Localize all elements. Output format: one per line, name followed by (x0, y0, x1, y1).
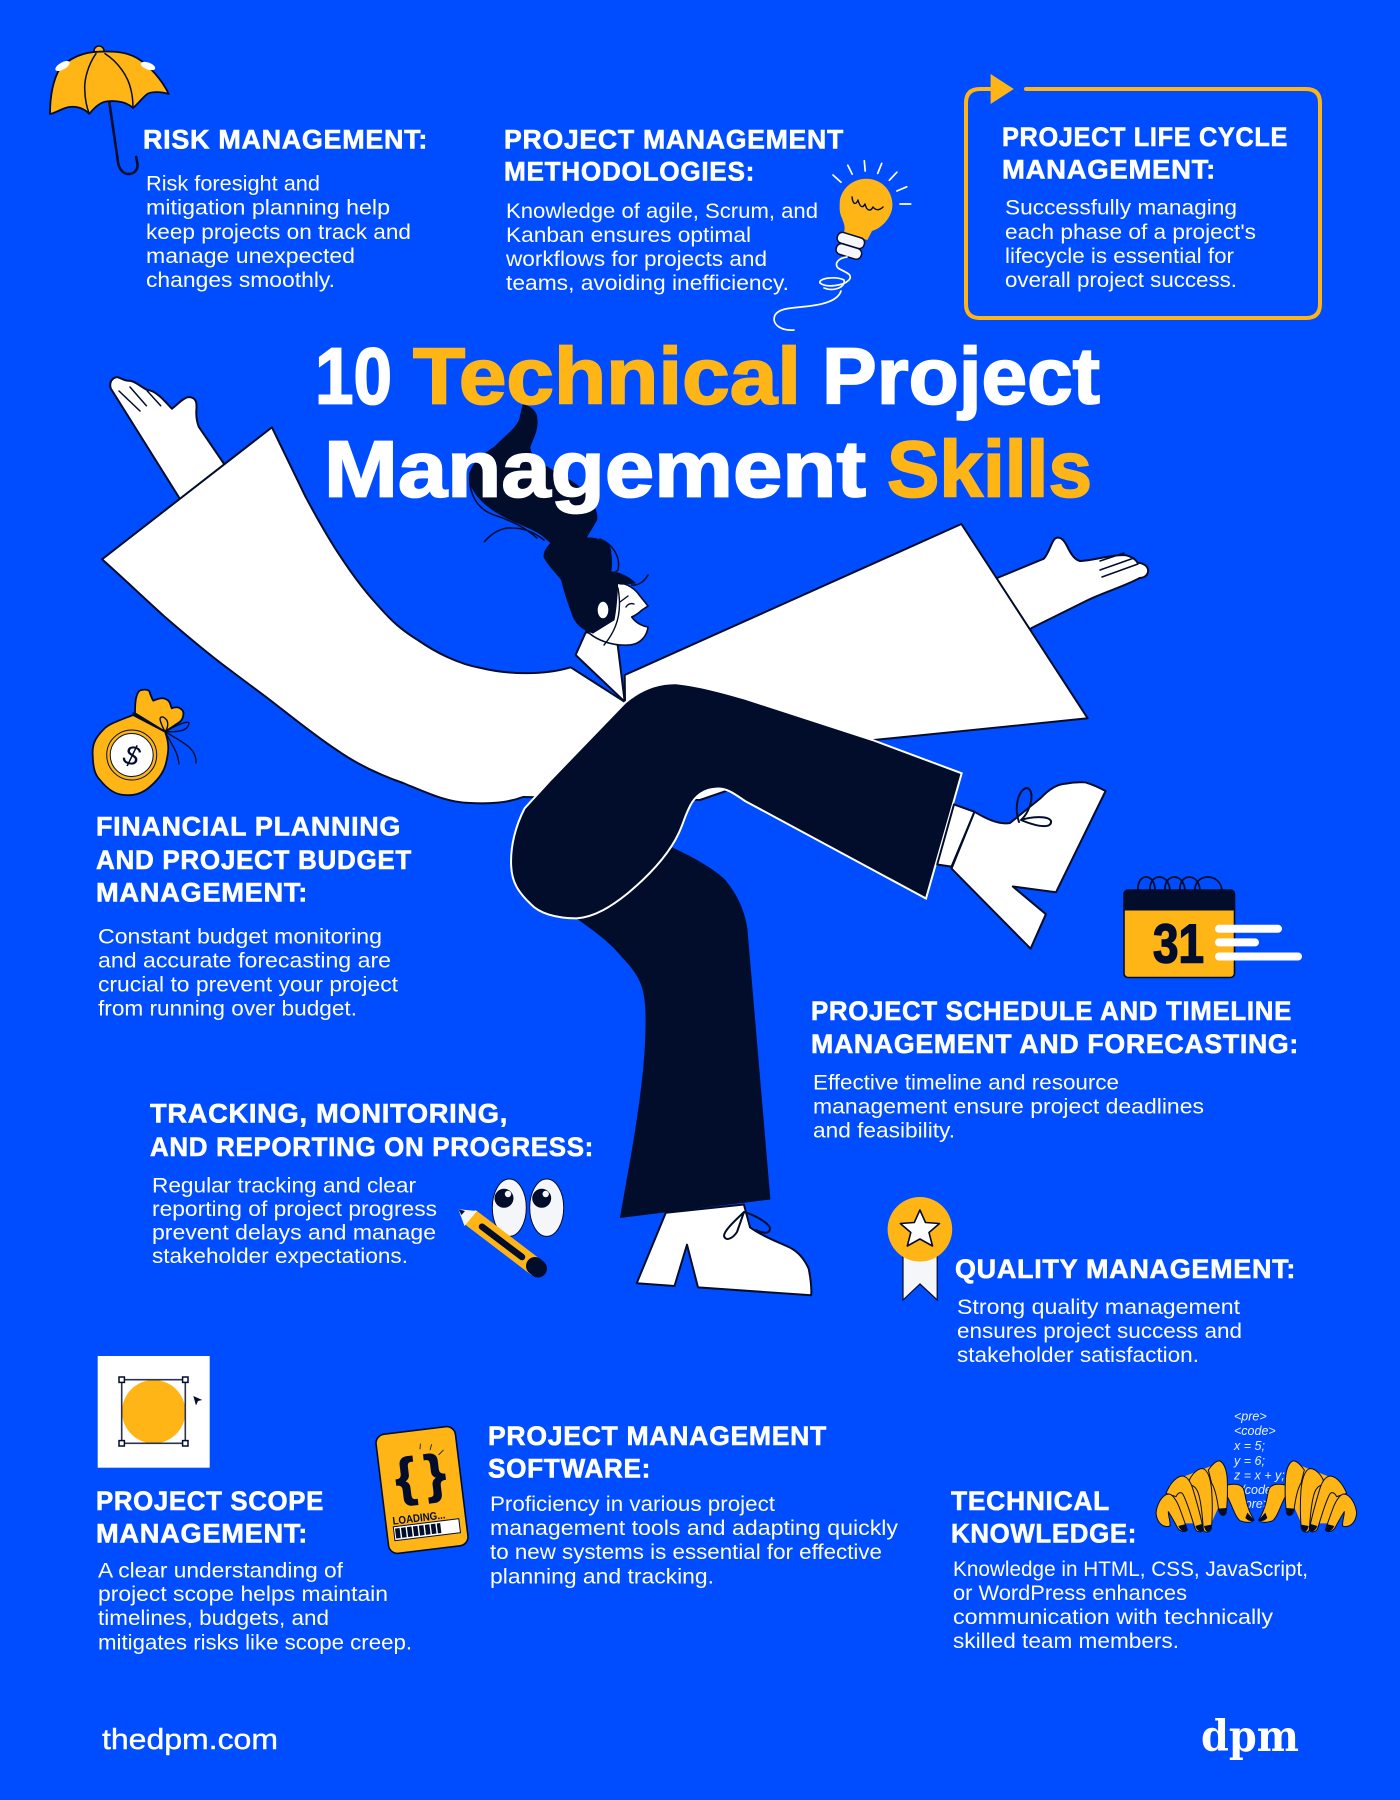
footer: website: thedpm.com (102, 1724, 278, 1756)
text block: quality management: stakeholder satisfaction. (957, 1343, 1199, 1367)
icon: calendar (1124, 877, 1298, 978)
text block: technical knowledge: skilled team members. (953, 1629, 1179, 1653)
text block: project schedule and timeline: MANAGEMENT AND FORECASTING: (811, 1029, 1299, 1059)
hair strands (470, 473, 648, 585)
text block: tracking, monitoring and reporting: stakeholder expectations. (152, 1244, 408, 1268)
text block: project scope management: timelines, budgets, and (98, 1606, 329, 1630)
text block: project scope management: mitigates risks like scope creep. (98, 1630, 412, 1654)
icon: money bag (93, 690, 196, 795)
title: Technical (413, 332, 801, 421)
text block: technical knowledge (951, 1486, 1308, 1653)
text block: quality management: ensures project success and (957, 1319, 1242, 1343)
text block: project schedule and timeline: PROJECT SCHEDULE AND TIMELINE (811, 996, 1292, 1026)
code snippet: <pre> (1234, 1410, 1267, 1424)
coat collar (576, 632, 625, 702)
icon: loading phone card (375, 1426, 469, 1554)
white coat with sleeves (102, 427, 1088, 803)
text block: project management software: Proficiency in various project (490, 1492, 775, 1516)
text block: project management software: management tools and adapting quickly (490, 1516, 898, 1540)
title (315, 332, 1100, 514)
code snippet: y = 6; (1233, 1454, 1265, 1468)
icon: light bulb (774, 161, 911, 330)
panel text: overall project success. (1005, 268, 1237, 292)
code snippet: x = 5; (1233, 1439, 1265, 1453)
text block: project schedule and timeline: management ensure project deadlines (813, 1095, 1204, 1119)
code snippet: z = x + y; (1233, 1468, 1285, 1482)
text block: tracking, monitoring and reporting: prevent delays and manage (152, 1220, 436, 1244)
text block: risk management: manage unexpected (146, 244, 355, 268)
left arm and hand (110, 377, 235, 515)
text block: project management software: PROJECT MANAGEMENT (488, 1421, 827, 1451)
footer: dpm logo: dpm (1201, 1712, 1299, 1762)
text block: project scope management (96, 1486, 412, 1654)
eye and brow lines (604, 588, 634, 645)
text block: financial planning: crucial to prevent your project (98, 973, 398, 997)
title: Skills (887, 425, 1092, 514)
text block: tracking, monitoring and reporting: TRACKING, MONITORING, (150, 1099, 508, 1129)
icon: loading phone card: } (422, 1444, 449, 1504)
text block: project management software: to new systems is essential for effective (490, 1540, 882, 1564)
text block: risk management (143, 124, 428, 292)
code snippet: <code> (1234, 1424, 1276, 1438)
icon: scope selection box (98, 1356, 210, 1468)
text block: project schedule and timeline: Effective timeline and resource (813, 1071, 1119, 1095)
code snippet: </code> (1234, 1483, 1279, 1497)
text block: financial planning (96, 812, 412, 1021)
text block: project scope management: MANAGEMENT: (96, 1519, 308, 1549)
text block: risk management: keep projects on track and (146, 220, 411, 244)
text block: project scope management: A clear understanding of (98, 1558, 343, 1582)
text block: project management methodologies: Knowledge of agile, Scrum, and (506, 199, 818, 223)
text block: project management methodologies: METHODOLOGIES: (504, 157, 755, 187)
icon: umbrella (50, 46, 169, 174)
icon: loading phone card: LOADING... (392, 1509, 446, 1528)
thigh of trouser (511, 683, 962, 918)
text block: technical knowledge: communication with technically (953, 1605, 1273, 1629)
lower foot boot (637, 1204, 811, 1295)
text block: project management methodologies: PROJECT MANAGEMENT (504, 124, 844, 154)
text block: project schedule and timeline: and feasibility. (813, 1119, 955, 1143)
text block: financial planning: Constant budget monitoring (98, 924, 382, 948)
icon: loading phone card: { (392, 1448, 419, 1508)
code snippet (1233, 1410, 1285, 1511)
code snippet: </pre> (1234, 1497, 1270, 1511)
text block: risk management: Risk foresight and (146, 172, 320, 196)
text block: project management software: SOFTWARE: (488, 1454, 651, 1484)
text block: risk management: changes smoothly. (146, 268, 335, 292)
text block: project scope management: project scope helps maintain (98, 1582, 388, 1606)
text block: risk management: mitigation planning help (146, 196, 390, 220)
panel text (1002, 122, 1288, 292)
raised foot sock and boot (937, 782, 1106, 949)
icon: medal with star (888, 1197, 952, 1300)
text block: tracking, monitoring and reporting: AND REPORTING ON PROGRESS: (150, 1132, 594, 1162)
hair (469, 405, 635, 633)
text block: quality management (955, 1254, 1296, 1367)
icon: money bag: $ (119, 738, 144, 773)
title: 10 (315, 332, 392, 421)
title: Project (822, 332, 1100, 421)
icon: typing hands with code (1156, 1410, 1357, 1532)
text block: quality management: Strong quality management (957, 1295, 1240, 1319)
text block: technical knowledge: or WordPress enhances (953, 1581, 1187, 1605)
text block: tracking, monitoring and reporting: Regular tracking and clear (152, 1173, 416, 1197)
panel text: Successfully managing (1005, 196, 1237, 220)
panel text: each phase of a project's (1005, 220, 1256, 244)
looped box outline (966, 89, 1320, 318)
text block: project management software: planning and tracking. (490, 1564, 714, 1588)
left hand (1156, 1461, 1254, 1532)
text block: project management methodologies: Kanban ensures optimal (506, 223, 751, 247)
title: Management (324, 425, 866, 514)
panel: project life cycle management (966, 74, 1320, 318)
text block: risk management: RISK MANAGEMENT: (143, 124, 428, 154)
text block: financial planning: from running over budget. (98, 997, 357, 1021)
text block: project management methodologies (504, 124, 844, 295)
face (586, 583, 648, 645)
lower trouser leg (570, 840, 770, 1218)
panel text: lifecycle is essential for (1005, 244, 1234, 268)
icon: eyes and pencil (458, 1179, 564, 1268)
text block: project schedule and timeline (811, 996, 1299, 1143)
text block: quality management: QUALITY MANAGEMENT: (955, 1254, 1296, 1284)
panel text: MANAGEMENT: (1002, 155, 1216, 185)
illustration: flying figure in white coat (102, 377, 1148, 1295)
text block: financial planning: MANAGEMENT: (96, 878, 308, 908)
text block: tracking, monitoring and reporting: reporting of project progress (152, 1197, 437, 1221)
ear (597, 601, 609, 619)
text block: tracking, monitoring and reporting (150, 1099, 594, 1268)
text block: financial planning: and accurate forecasting are (98, 948, 391, 972)
text block: project management software (488, 1421, 898, 1588)
text block: technical knowledge: Knowledge in HTML, CSS, JavaScript, (953, 1557, 1308, 1581)
text block: project management methodologies: workflows for projects and (505, 247, 767, 271)
loop arrow head (991, 74, 1014, 104)
text block: technical knowledge: KNOWLEDGE: (951, 1519, 1137, 1549)
text block: financial planning: AND PROJECT BUDGET (96, 845, 412, 875)
right hand (1259, 1461, 1357, 1532)
panel text: PROJECT LIFE CYCLE (1002, 122, 1288, 152)
text block: technical knowledge: TECHNICAL (951, 1486, 1110, 1516)
text block: project management methodologies: teams, avoiding inefficiency. (506, 271, 789, 295)
text block: financial planning: FINANCIAL PLANNING (96, 812, 401, 842)
text block: project scope management: PROJECT SCOPE (96, 1486, 324, 1516)
icon: calendar: 31 (1153, 912, 1204, 974)
right arm and hand (985, 538, 1148, 640)
